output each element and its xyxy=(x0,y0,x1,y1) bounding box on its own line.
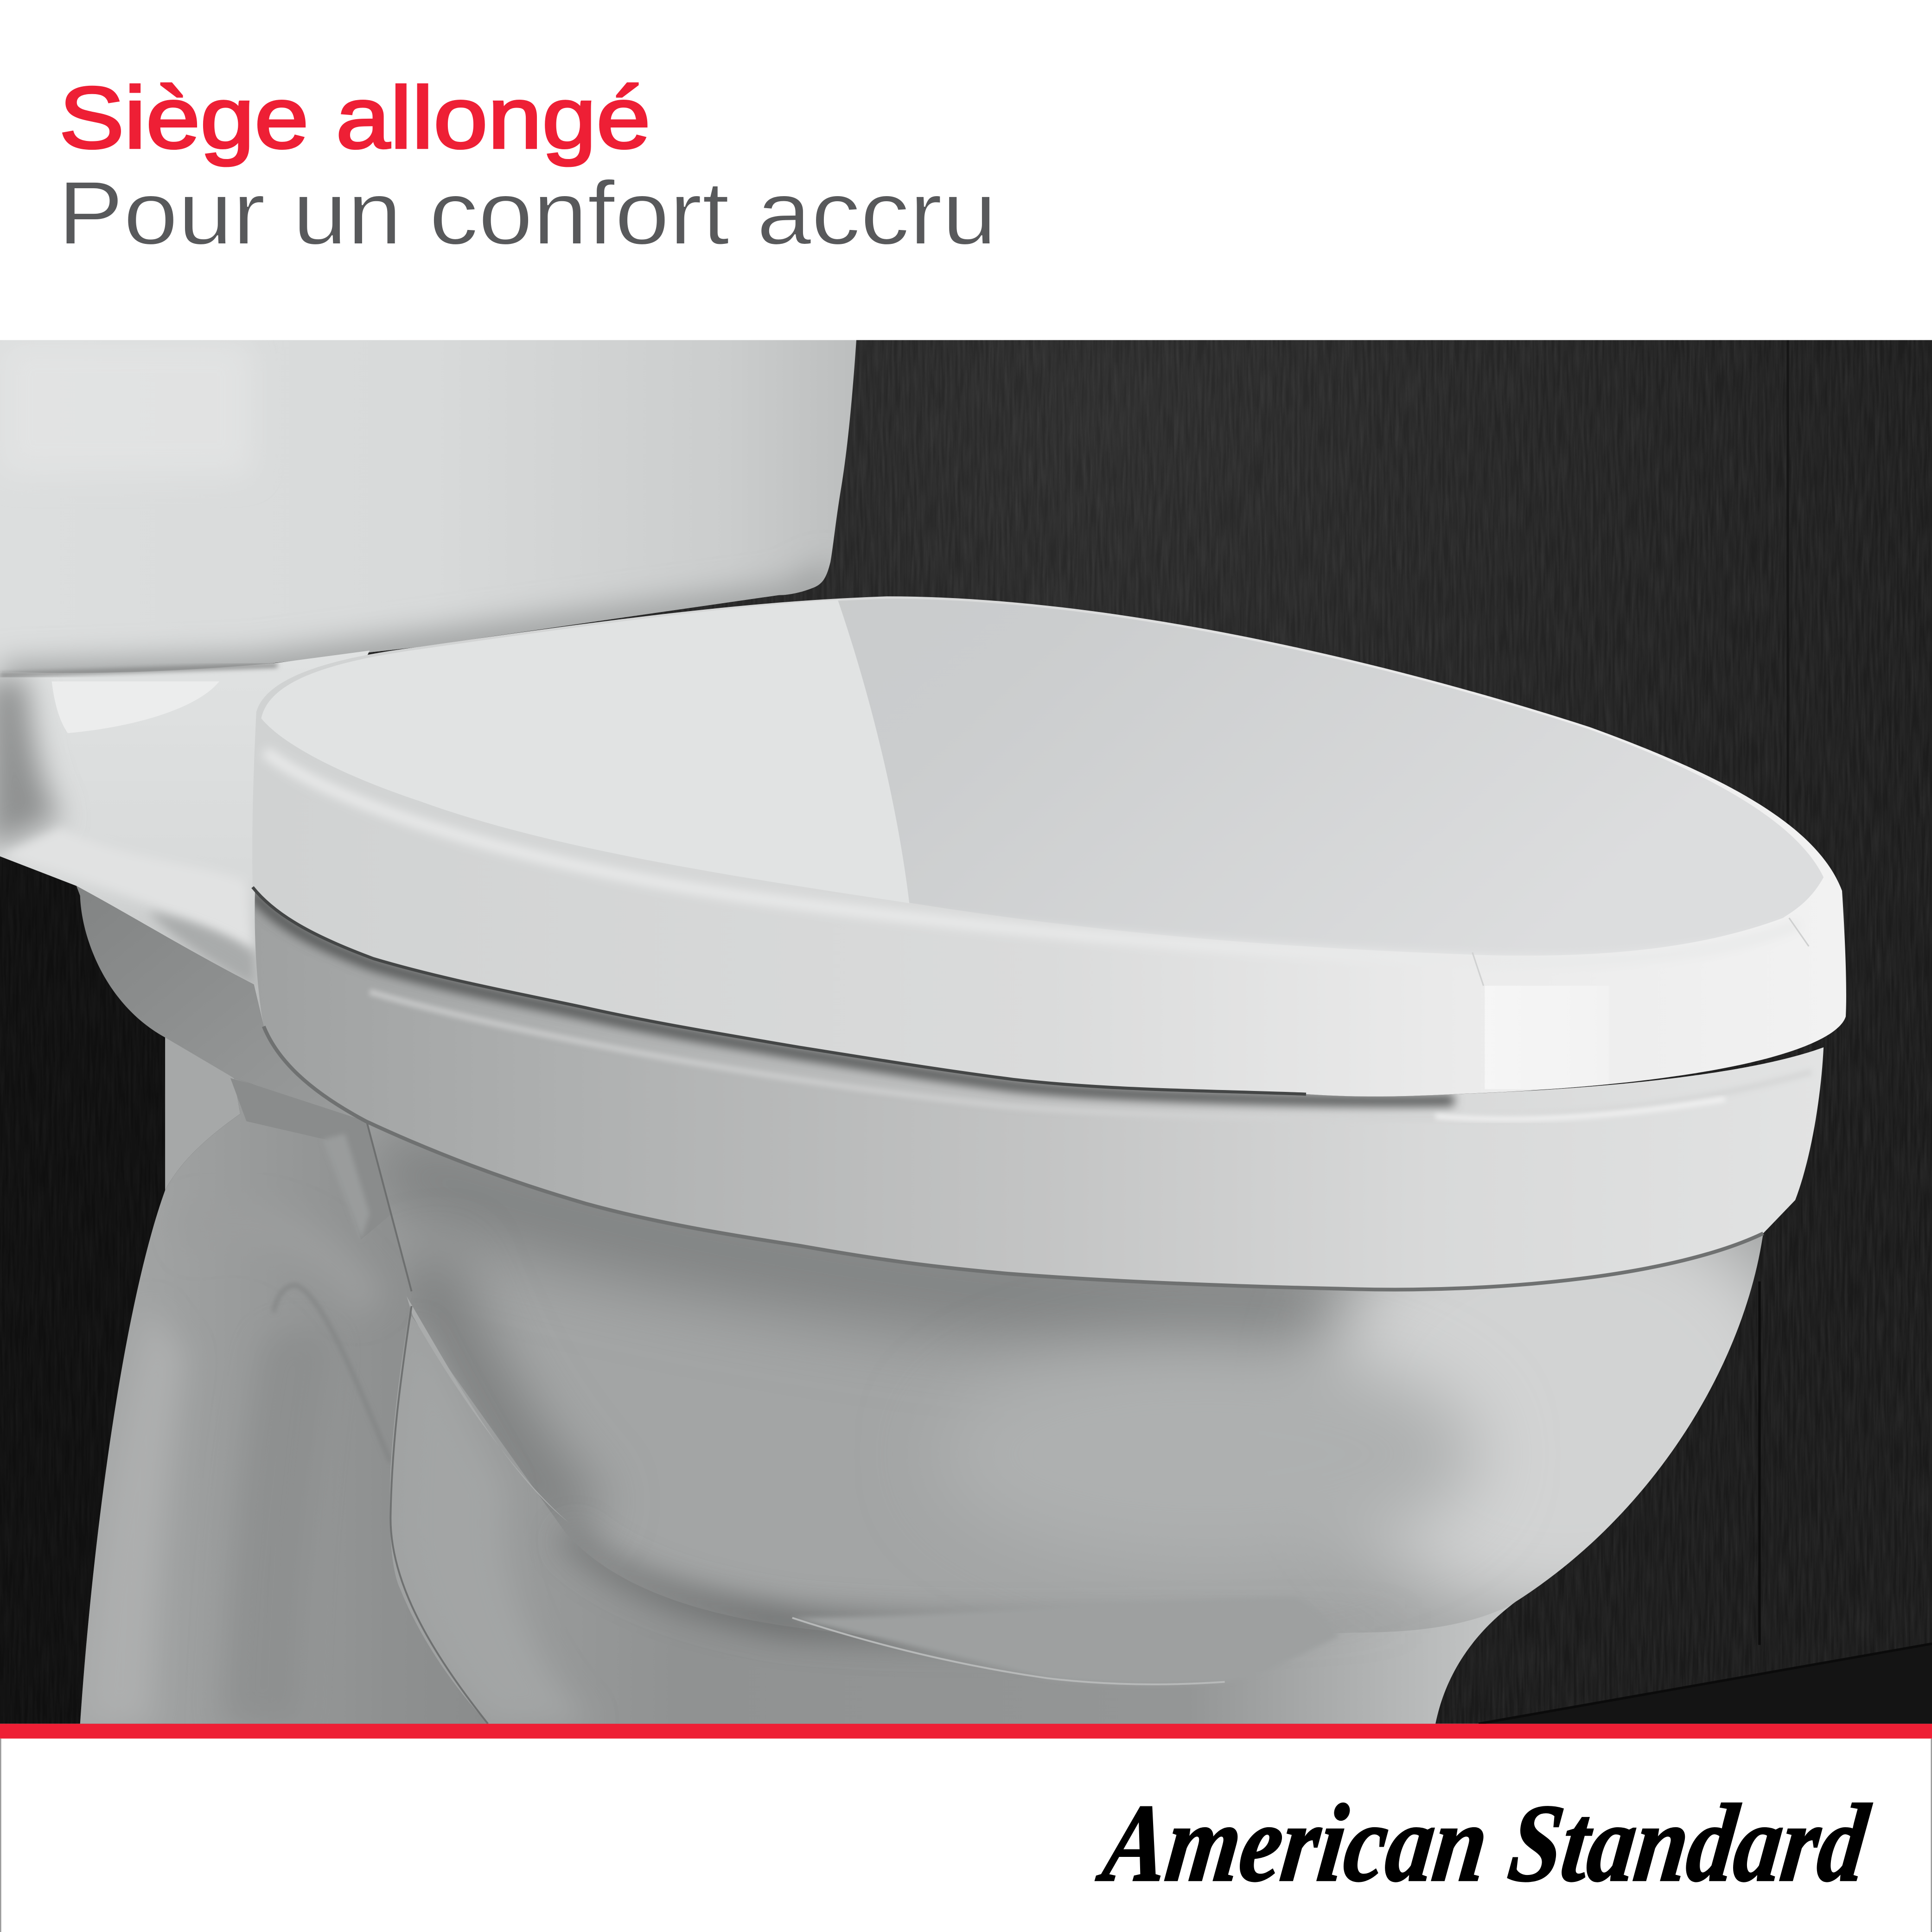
heading: Siège allongé: Siège allongé xyxy=(59,69,650,166)
toilet bowl xyxy=(366,1119,1811,1724)
subheading: Pour un confort accru: Pour un confort accru xyxy=(58,163,997,263)
water tank xyxy=(0,340,856,684)
crease shadow xyxy=(566,1533,1417,1630)
under deck shadow xyxy=(77,886,366,1121)
wave reflection xyxy=(792,1597,1339,1684)
bowl back deck xyxy=(0,650,370,1027)
toilet lid xyxy=(252,596,1846,1097)
upper bowl shadow xyxy=(370,1158,1355,1319)
lid edge shine patch xyxy=(1485,986,1609,1089)
seat shadow line xyxy=(253,887,1306,1094)
lower foot xyxy=(390,1316,1528,1724)
lid front edge highlight xyxy=(265,752,1799,962)
bowl rim xyxy=(253,887,1824,1289)
bowl right highlight xyxy=(1319,1195,1811,1614)
bowl crease highlight xyxy=(407,1296,569,1523)
red divider band xyxy=(0,1724,1932,1739)
lid top surface xyxy=(261,599,1824,956)
dark textured wall xyxy=(0,340,1932,1724)
photo: toilet against dark wall xyxy=(0,340,1932,1724)
lid glossy reflection xyxy=(261,600,909,903)
toilet pedestal xyxy=(80,1035,493,1724)
footer frame lines xyxy=(0,1739,1932,1932)
